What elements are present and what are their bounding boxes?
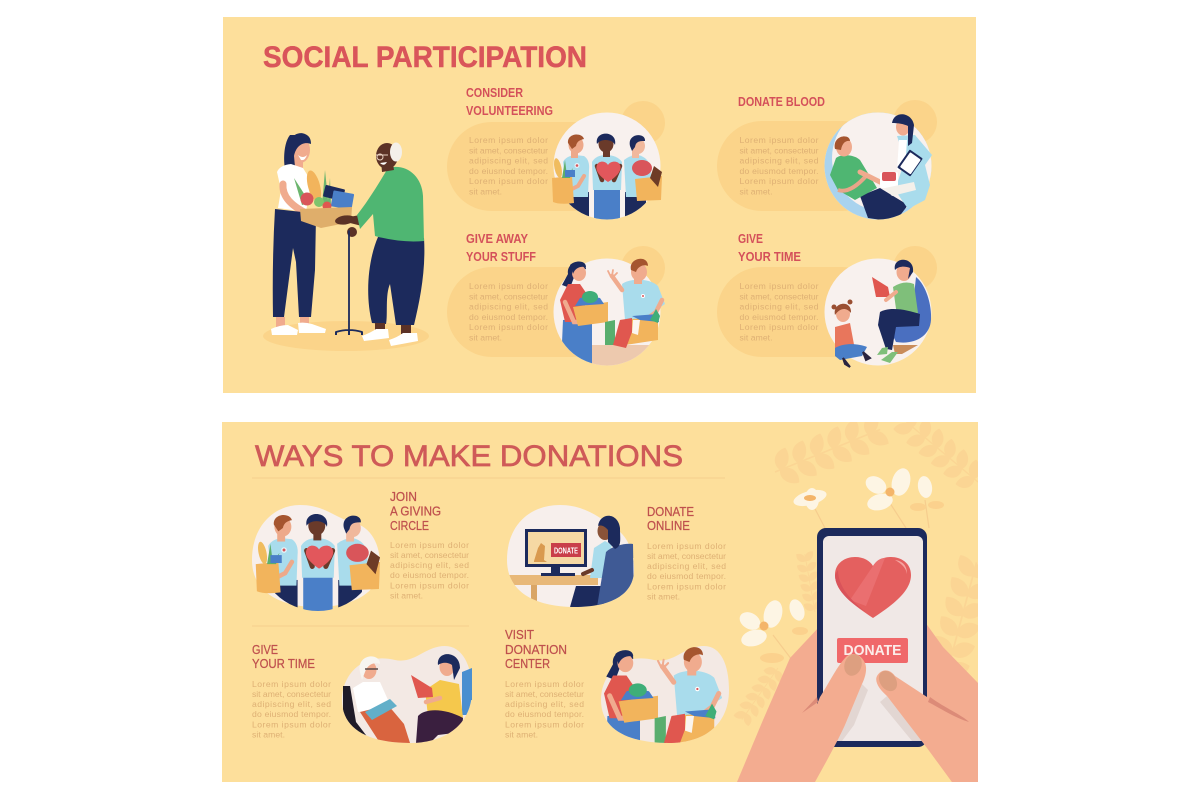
text block: Lorem ipsum dolor	[647, 581, 726, 591]
heading: join a giving circle: JOIN	[390, 490, 417, 504]
text block: Lorem ipsum dolor	[505, 679, 584, 689]
card: consider volunteering	[447, 86, 665, 222]
panel: social participation	[223, 17, 976, 393]
text block: Lorem ipsum dolor	[252, 679, 331, 689]
title: ways to make donations: WAYS TO MAKE DONATIONS	[255, 440, 683, 473]
illustration: sorting donated clothes	[560, 259, 665, 370]
text block: do eiusmod tempor.	[647, 571, 726, 581]
heading: give away your stuff: GIVE AWAY	[466, 232, 529, 246]
heading: give your time: YOUR TIME	[738, 250, 801, 264]
heading: give your time: GIVE	[738, 232, 763, 246]
text block: adipiscing elit, sed	[505, 699, 584, 709]
card: donate online	[507, 505, 726, 607]
text block: sit amet.	[740, 186, 772, 196]
phone	[817, 528, 927, 747]
heading: give your time	[252, 643, 315, 671]
card: visit donation center	[505, 630, 729, 743]
text block: Lorem ipsum dolor	[740, 135, 819, 145]
text block	[469, 281, 548, 342]
text block: Lorem ipsum dolor	[740, 176, 819, 186]
flowers	[736, 466, 944, 663]
text block: Lorem ipsum dolor	[505, 719, 584, 729]
text block: sit amet, consectetur	[740, 291, 819, 301]
text block	[647, 541, 726, 601]
text block: sit amet, consectetur	[647, 551, 726, 561]
text block: Lorem ipsum dolor	[390, 580, 469, 590]
heading: visit donation center: CENTER	[505, 657, 550, 671]
heading: join a giving circle: CIRCLE	[390, 519, 429, 533]
illustration: woman giving a box to an elderly man	[263, 133, 429, 351]
heading: give away your stuff: YOUR STUFF	[466, 250, 536, 264]
illustration: nurse and blood donor	[824, 112, 932, 220]
heading: donate blood: DONATE BLOOD	[738, 95, 825, 109]
card: join a giving circle	[252, 490, 469, 614]
heading: visit donation center	[505, 628, 567, 671]
text block: Lorem ipsum dolor	[740, 281, 819, 291]
text block: adipiscing elit, sed	[469, 156, 548, 166]
text block	[740, 281, 819, 342]
left thumb	[800, 654, 866, 782]
text block: adipiscing elit, sed	[740, 302, 819, 312]
panel: ways to make donations	[222, 401, 1002, 782]
text block: do eiusmod tempor.	[740, 312, 818, 322]
heading: consider volunteering: CONSIDER	[466, 86, 523, 100]
heading: consider volunteering: VOLUNTEERING	[466, 104, 553, 118]
text block: adipiscing elit, sed	[469, 302, 548, 312]
text block: do eiusmod tempor.	[469, 166, 548, 176]
left palm	[737, 626, 820, 782]
text block: sit amet.	[740, 332, 772, 342]
illustration: hands holding phone with donate button	[734, 422, 978, 782]
text block: Lorem ipsum dolor	[469, 322, 548, 332]
text block	[740, 135, 819, 196]
text block	[505, 679, 584, 739]
illustration: three volunteers	[552, 134, 662, 222]
text block: sit amet.	[469, 332, 502, 342]
text block: Lorem ipsum dolor	[469, 135, 548, 145]
text block: do eiusmod tempor.	[505, 709, 584, 719]
foliage background	[734, 422, 978, 726]
heading: give your time: GIVE	[252, 643, 278, 657]
text block: sit amet.	[469, 186, 502, 196]
donate button: DONATE	[844, 643, 902, 659]
text block: sit amet, consectetur	[390, 550, 469, 560]
text block: sit amet.	[252, 729, 285, 739]
text block: sit amet.	[390, 590, 423, 600]
text block: adipiscing elit, sed	[252, 699, 331, 709]
heading: visit donation center: DONATION	[505, 643, 567, 657]
card: donate blood	[717, 95, 940, 222]
card: give your time	[717, 232, 937, 367]
text block: sit amet, consectetur	[505, 689, 584, 699]
heading: visit donation center: VISIT	[505, 628, 534, 642]
heading: join a giving circle: A GIVING	[390, 504, 441, 518]
text block: Lorem ipsum dolor	[252, 719, 331, 729]
text block: Lorem ipsum dolor	[469, 281, 548, 291]
text block: do eiusmod tempor.	[252, 709, 331, 719]
heading: give away your stuff	[466, 232, 536, 264]
title: social participation: SOCIAL PARTICIPATION	[263, 41, 587, 74]
text block: sit amet, consectetur	[469, 291, 548, 301]
illustration: sorting donated clothes	[604, 647, 722, 743]
heart	[835, 557, 911, 618]
text block: sit amet, consectetur	[740, 145, 819, 155]
text block: sit amet.	[647, 591, 680, 601]
illustration: woman reading to an elderly woman	[343, 654, 472, 743]
right palm	[925, 622, 978, 782]
text block	[252, 679, 331, 739]
text block: Lorem ipsum dolor	[469, 176, 548, 186]
text block: adipiscing elit, sed	[647, 561, 726, 571]
heading: donate online	[647, 505, 694, 533]
text block: adipiscing elit, sed	[740, 156, 819, 166]
heading: join a giving circle	[390, 490, 441, 533]
card: give your time	[252, 643, 472, 743]
text block: Lorem ipsum dolor	[390, 540, 469, 550]
right thumb	[876, 670, 969, 782]
text block	[469, 135, 548, 196]
card: give away your stuff	[447, 232, 665, 370]
illustration: person donating at a computer	[508, 516, 634, 607]
heading: donate online: DONATE	[647, 505, 694, 519]
text block: do eiusmod tempor.	[390, 570, 469, 580]
text block: do eiusmod tempor.	[469, 312, 548, 322]
text block: Lorem ipsum dolor	[740, 322, 819, 332]
donate button	[837, 638, 908, 663]
heading: consider volunteering	[466, 86, 553, 118]
text block	[390, 540, 469, 600]
text block: Lorem ipsum dolor	[647, 541, 726, 551]
text block: sit amet, consectetur	[252, 689, 331, 699]
illustration: three volunteers	[256, 514, 380, 614]
heading: donate online: ONLINE	[647, 519, 690, 533]
text block: adipiscing elit, sed	[390, 560, 469, 570]
text block: do eiusmod tempor.	[740, 166, 818, 176]
heading: give your time: YOUR TIME	[252, 657, 315, 671]
illustration: person donating at a computer: DONATE	[554, 546, 578, 556]
text block: sit amet, consectetur	[469, 145, 548, 155]
heading: give your time	[738, 232, 801, 264]
text block: sit amet.	[505, 729, 538, 739]
illustration: woman reading to a child	[832, 260, 931, 367]
